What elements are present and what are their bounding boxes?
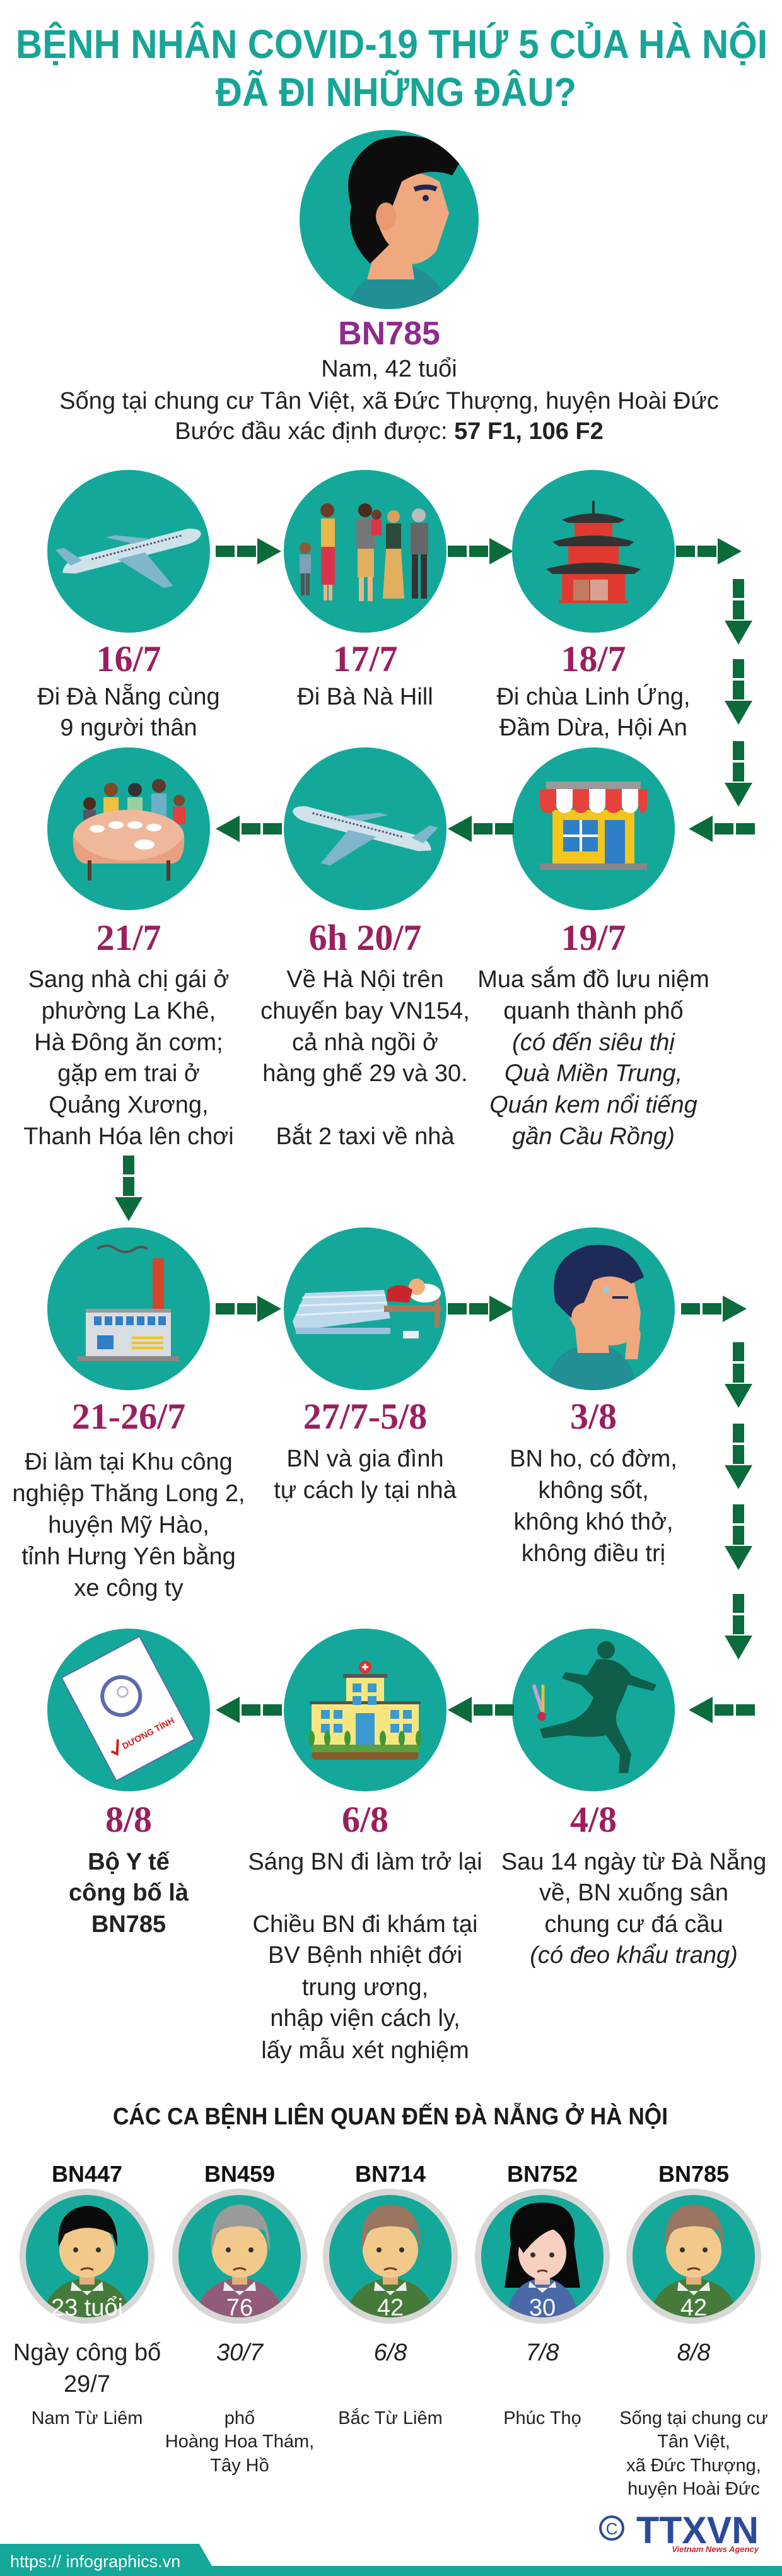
date labels row 1: 16/7 xyxy=(96,638,161,679)
case locations xyxy=(32,2408,768,2499)
footer: https:// infographics.vn xyxy=(10,2552,180,2571)
text: 18/7 xyxy=(496,683,691,741)
text: 21/7: Hà Đông ăn cơm; xyxy=(34,1029,223,1056)
text: 20/7: chuyến bay VN154, xyxy=(260,998,470,1024)
text: 27/7-5/8 xyxy=(274,1446,457,1504)
text: 3/8 xyxy=(510,1446,677,1567)
case: BN459 xyxy=(172,2166,307,2324)
date labels row 3 xyxy=(72,1396,617,1437)
text: 6/8: nhập viện cách ly, xyxy=(270,2005,460,2032)
case: BN447 xyxy=(20,2166,155,2324)
logo: TTXVN xyxy=(636,2509,759,2551)
case: BN447: 23 tuổi xyxy=(51,2295,123,2321)
patient info: Bước đầu xác định được: 57 F1, 106 F2 xyxy=(175,418,604,445)
case locations: phố xyxy=(225,2408,255,2428)
title: ĐÃ ĐI NHỮNG ĐÂU? xyxy=(216,69,576,115)
patient info: Nam, 42 tuổi xyxy=(321,356,457,382)
case: BN459: BN459 xyxy=(204,2161,275,2187)
text: 21-26/7: nghiệp Thăng Long 2, xyxy=(12,1480,245,1507)
case: BN785: 42 xyxy=(680,2295,707,2321)
text: 6/8: trung ương, xyxy=(302,1974,428,2001)
date labels row 3: 21-26/7 xyxy=(72,1396,185,1437)
case locations: Tây Hồ xyxy=(210,2456,269,2476)
case: BN785 xyxy=(626,2166,761,2324)
date labels row 2 xyxy=(96,917,626,958)
text: 18/7: Đầm Dừa, Hội An xyxy=(499,715,687,741)
text: 19/7: gần Cầu Rồng) xyxy=(512,1123,675,1150)
arrow down xyxy=(725,659,752,725)
text: 19/7 xyxy=(477,966,709,1150)
arrow left xyxy=(448,1697,514,1723)
case dates: 8/8 xyxy=(677,2339,710,2366)
title xyxy=(16,21,767,115)
arrow xyxy=(448,1296,513,1322)
case: BN714: BN714 xyxy=(355,2161,426,2187)
case locations: Hoàng Hoa Thám, xyxy=(165,2432,314,2452)
text: 4/8: chung cư đá cầu xyxy=(544,1911,723,1938)
text: 21-26/7 xyxy=(12,1449,245,1601)
text: 18/7: Đi chùa Linh Ứng, xyxy=(496,683,691,710)
text: 19/7: (có đến siêu thị xyxy=(512,1029,675,1056)
text: 4/8 xyxy=(501,1847,766,1969)
case locations: Phúc Thọ xyxy=(503,2408,581,2428)
text: 16/7: 9 người thân xyxy=(60,715,197,741)
arrow xyxy=(216,538,281,565)
logo: Vietnam News Agency xyxy=(672,2544,759,2554)
text: 27/7-5/8: tự cách ly tại nhà xyxy=(274,1477,457,1504)
case locations: Bắc Từ Liêm xyxy=(338,2408,443,2428)
arrow down xyxy=(725,741,752,807)
step 19/7: shop xyxy=(512,747,675,910)
text: 20/7: hàng ghế 29 và 30. xyxy=(262,1060,468,1087)
text: 21/7: Thanh Hóa lên chơi xyxy=(23,1123,234,1150)
case locations: xã Đức Thượng, xyxy=(626,2456,761,2476)
date labels row 4: 8/8 xyxy=(105,1799,152,1840)
step 6/8: hospital xyxy=(284,1629,446,1791)
text: 21/7: gặp em trai ở xyxy=(57,1060,200,1087)
text: 21-26/7: huyện Mỹ Hào, xyxy=(48,1512,209,1538)
text: 8/8: BN785 xyxy=(91,1911,166,1938)
arrow left xyxy=(216,1697,282,1723)
case: BN752: BN752 xyxy=(507,2161,578,2187)
text: 6/8 xyxy=(248,1849,482,2064)
arrow left xyxy=(689,816,755,842)
text: 21-26/7: Đi làm tại Khu công xyxy=(25,1449,233,1475)
patient info: BN785 xyxy=(338,315,440,352)
step 16/7: plane xyxy=(47,470,212,633)
section heading: CÁC CA BỆNH LIÊN QUAN ĐẾN ĐÀ NẴNG Ở HÀ NỘI xyxy=(113,2102,668,2130)
logo: C xyxy=(606,2519,617,2538)
date labels row 3: 27/7-5/8 xyxy=(303,1396,427,1437)
step 3/8: coughing man xyxy=(512,1227,675,1391)
date labels row 3: 3/8 xyxy=(570,1396,617,1437)
arrow xyxy=(216,1296,281,1322)
text: 20/7: Bắt 2 taxi về nhà xyxy=(276,1123,455,1150)
icon: patient portrait xyxy=(300,130,479,314)
text: 6/8: Chiều BN đi khám tại xyxy=(253,1911,477,1938)
text: 3/8: không sốt, xyxy=(538,1477,649,1504)
step 21-26/7: factory xyxy=(47,1227,210,1390)
date labels row 2: 21/7 xyxy=(96,917,161,958)
patient info xyxy=(59,315,719,445)
text: 4/8: về, BN xuống sân xyxy=(539,1880,728,1906)
text: 19/7: Quà Miền Trung, xyxy=(505,1060,682,1087)
text: 19/7: Mua sắm đồ lưu niệm xyxy=(477,966,709,993)
case: BN447: BN447 xyxy=(52,2161,122,2187)
case dates: Ngày công bố xyxy=(13,2339,161,2366)
text: 16/7: Đi Đà Nẵng cùng xyxy=(37,682,220,710)
text: 21/7 xyxy=(23,966,234,1150)
date labels row 4: 6/8 xyxy=(342,1799,388,1840)
text: 21-26/7: xe công ty xyxy=(74,1575,184,1601)
step 21/7: family dinner xyxy=(47,747,210,910)
text: 8/8: Bộ Y tế xyxy=(88,1849,170,1875)
arrow down xyxy=(725,579,752,645)
step 17/7: family xyxy=(284,470,446,633)
text: 17/7: Đi Bà Nà Hill xyxy=(297,684,433,710)
arrow xyxy=(448,538,513,565)
text: 16/7 xyxy=(37,682,220,741)
arrow down xyxy=(115,1156,143,1221)
case dates: 6/8 xyxy=(374,2339,407,2366)
case: BN459: 76 xyxy=(226,2295,253,2321)
text: 21/7: phường La Khê, xyxy=(42,998,216,1024)
step 8/8: positive test document: DƯƠNG TÍNH xyxy=(120,1715,176,1751)
date labels row 2: 19/7 xyxy=(561,917,626,958)
arrow left xyxy=(689,1697,755,1723)
step 18/7: pagoda xyxy=(512,470,675,633)
case dates xyxy=(13,2339,710,2397)
text: 8/8: công bố là xyxy=(69,1880,189,1906)
text: 6/8: BV Bệnh nhiệt đới xyxy=(268,1942,462,1969)
text: 8/8 xyxy=(69,1849,189,1938)
date labels row 1: 17/7 xyxy=(332,638,398,679)
case locations: huyện Hoài Đức xyxy=(627,2479,760,2499)
text: 4/8: Sau 14 ngày từ Đà Nẵng xyxy=(501,1847,766,1875)
text: 20/7 xyxy=(260,966,470,1150)
arrow xyxy=(681,1296,747,1322)
text: 21-26/7: tỉnh Hưng Yên bằng xyxy=(21,1543,236,1570)
date labels row 2: 6h 20/7 xyxy=(309,917,421,958)
step 27/7-5/8: bed xyxy=(284,1227,446,1390)
text: 21/7: Sang nhà chị gái ở xyxy=(28,966,229,993)
step 20/7: plane xyxy=(282,747,446,910)
case: BN752 xyxy=(475,2166,610,2324)
text: 4/8: (có đeo khẩu trang) xyxy=(530,1942,738,1969)
date labels row 4: 4/8 xyxy=(570,1799,617,1840)
text: 20/7: cả nhà ngồi ở xyxy=(292,1029,438,1056)
patient info: Sống tại chung cư Tân Việt, xã Đức Thượng, huyện Hoài Đức xyxy=(59,388,719,414)
case: BN714: 42 xyxy=(377,2295,404,2321)
case dates: 29/7 xyxy=(64,2371,110,2397)
text: 3/8: BN ho, có đờm, xyxy=(510,1446,677,1472)
case dates: 30/7 xyxy=(216,2339,264,2366)
text: 19/7: Quán kem nổi tiếng xyxy=(489,1092,697,1118)
text: 21/7: Quảng Xương, xyxy=(49,1092,209,1118)
case: BN714 xyxy=(323,2166,458,2324)
arrows down xyxy=(725,1342,752,1660)
case locations: Sống tại chung cư xyxy=(619,2408,768,2428)
arrow left xyxy=(216,816,282,842)
step 4/8: kicking xyxy=(512,1629,675,1791)
text: 6/8: lấy mẫu xét nghiệm xyxy=(261,2037,469,2064)
case locations: Tân Việt, xyxy=(657,2432,730,2452)
text: 6/8: Sáng BN đi làm trở lại xyxy=(248,1849,482,1875)
text: 3/8: không khó thở, xyxy=(513,1509,674,1535)
date labels row 1: 18/7 xyxy=(561,638,626,679)
step 8/8: positive test document xyxy=(47,1629,210,1791)
text: 3/8: không điều trị xyxy=(522,1540,665,1567)
case: BN752: 30 xyxy=(529,2295,556,2321)
date labels row 4 xyxy=(105,1799,617,1840)
text: 19/7: quanh thành phố xyxy=(503,998,684,1024)
footer xyxy=(0,2544,782,2576)
date labels row 1 xyxy=(96,638,626,679)
case locations: Nam Từ Liêm xyxy=(32,2408,143,2428)
case dates: 7/8 xyxy=(526,2339,559,2366)
case: BN785: BN785 xyxy=(658,2161,729,2187)
text: 20/7: Về Hà Nội trên xyxy=(286,966,444,993)
arrow xyxy=(676,538,742,565)
text: 27/7-5/8: BN và gia đình xyxy=(286,1446,444,1472)
arrow left xyxy=(448,816,514,842)
